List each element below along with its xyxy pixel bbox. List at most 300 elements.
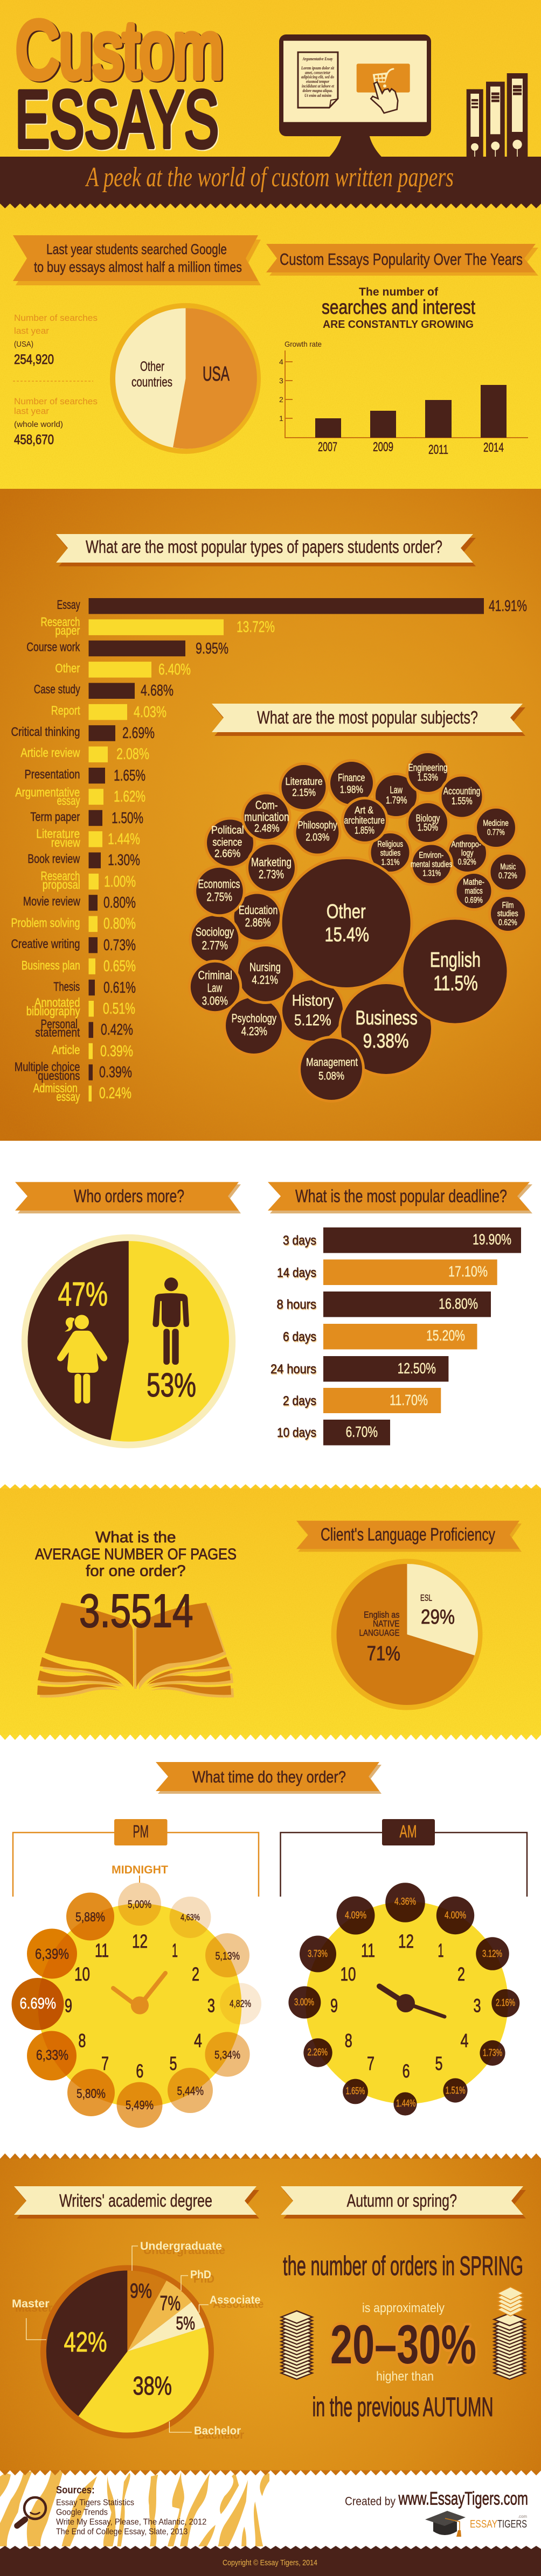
bar chart: paper types: Problem solving [11, 916, 80, 930]
bubble labels: 2.66% [214, 848, 240, 860]
bar chart: paper types: 1.00% [104, 873, 136, 890]
icon: computer monitor with essay and shopping cart [279, 34, 431, 157]
bar chart: paper types: 4.68% [141, 682, 174, 699]
banner: autumn or spring [281, 2186, 526, 2219]
pie chart: academic degree: 5% [176, 2313, 195, 2334]
clock: PM: 11 [95, 1940, 109, 1961]
banner: language proficiency [296, 1521, 522, 1552]
bubble labels: 9.38% [363, 1030, 409, 1052]
AM tab and bracket [280, 1819, 527, 1897]
pie chart: academic degree [12, 2240, 260, 2439]
bubble labels: 0.62% [498, 918, 517, 928]
logo: Essay Tigers [425, 2511, 527, 2537]
bar chart: deadlines: 11.70% [390, 1392, 428, 1408]
bar chart: deadlines: 15.20% [426, 1327, 465, 1344]
bar chart: growth rate: 4 [279, 357, 283, 366]
pie chart: female vs male [22, 1234, 235, 1448]
icon: essay paper: amet, consectetur [305, 69, 331, 75]
text block: sources: Essay Tigers Statistics [56, 2498, 134, 2507]
bar chart: paper types [11, 598, 527, 1104]
bar chart: paper types: proposal [43, 878, 80, 892]
bubble labels: Law [207, 981, 222, 995]
bubble labels: Music [500, 862, 516, 872]
icon: essay paper: adipisicing elit, sed do [301, 74, 334, 80]
bar chart: paper types: essay [57, 794, 80, 808]
text block: searches and interest: ARE CONSTANTLY GROWING [323, 319, 474, 331]
bar chart: paper types: Thesis [53, 980, 80, 994]
bar chart: deadlines: 19.90% [473, 1231, 511, 1248]
bubble labels: matics [464, 887, 483, 896]
clock: PM: 10 [74, 1964, 90, 1985]
bubble labels: Criminal [198, 968, 232, 982]
bubble labels: History [292, 992, 334, 1009]
bar chart: paper types: 4.03% [134, 704, 167, 721]
bubble labels: Biology [416, 813, 440, 824]
bar chart: paper types: bibliography [26, 1004, 80, 1018]
clock: AM: 4.00% [445, 1910, 466, 1920]
banner: popular subjects [212, 704, 525, 736]
clock: PM: 6,33% [36, 2047, 68, 2063]
icon: essay paper: dolore magna aliqua. [303, 88, 333, 93]
bar chart: deadlines: 6 days [283, 1330, 316, 1344]
text block: created by: Created by [345, 2495, 396, 2508]
icon: left paper stack [281, 2311, 313, 2380]
text block: average number of pages: AVERAGE NUMBER OF PAGES [35, 1546, 237, 1563]
banner: popularity over the years [266, 244, 538, 276]
bar chart: deadlines: 16.80% [439, 1295, 478, 1312]
icon: open book [37, 1603, 234, 1697]
bubble labels: 2.86% [245, 916, 271, 929]
clock: PM: 6,39% [35, 1946, 69, 1962]
bar chart: paper types: essay [56, 1090, 80, 1104]
bar chart: paper types: 0.39% [100, 1043, 133, 1060]
pie chart: language proficiency: NATIVE [373, 1619, 400, 1629]
title: Custom: Custom [16, 4, 223, 95]
bubble labels: munication [244, 810, 289, 824]
bar chart: paper types: 6.40% [158, 661, 191, 678]
pie chart: academic degree: Associate [210, 2294, 260, 2306]
bar chart: paper types: Multiple choice [15, 1060, 80, 1074]
bar chart: paper types: 1.44% [108, 831, 140, 848]
clock: PM: 5,49% [126, 2098, 154, 2112]
PM tab and bracket: PM [133, 1822, 149, 1841]
icon: essay paper: Argumentative Essay [302, 56, 333, 61]
bar chart: paper types: 0.65% [103, 958, 136, 975]
clock: PM: 7 [101, 2053, 109, 2074]
bar chart: paper types: paper [55, 623, 80, 637]
text block: search statistics: (whole world) [14, 420, 63, 429]
icon: pointing hand cursor [371, 82, 398, 113]
bubble labels: studies [497, 909, 518, 918]
bubble labels: 0.72% [498, 872, 517, 881]
bubble labels: 0.69% [464, 896, 483, 905]
clock: AM: 10 [341, 1964, 356, 1985]
PM tab and bracket [13, 1819, 259, 1897]
bubble labels: Engineering [408, 762, 447, 773]
bubble labels: Philosophy [298, 820, 337, 831]
bar chart: paper types: Term paper [30, 810, 80, 824]
pie chart: academic degree: Master [12, 2298, 50, 2310]
bubble labels: architecture [344, 815, 385, 826]
bar chart: deadlines: 24 hours [270, 1362, 316, 1377]
bar chart: deadlines: 10 days [277, 1426, 316, 1440]
banner: academic degree [14, 2186, 259, 2219]
bar chart: paper types: Essay [57, 598, 80, 612]
bubble labels: Nursing [249, 960, 281, 974]
banner: searched Google [13, 235, 261, 285]
clock: AM: 5 [435, 2053, 443, 2074]
clock: AM: 6 [403, 2061, 410, 2082]
header ribbon with tagline [0, 157, 541, 208]
icon: essay paper: Lorem ipsum dolor sit [301, 65, 335, 71]
clock: AM: 12 [398, 1931, 414, 1952]
bar chart: paper types: 0.24% [99, 1085, 131, 1102]
bubble labels: 2.48% [254, 823, 280, 834]
banner: academic degree: Writers' academic degree [59, 2191, 212, 2210]
banner: who orders more [15, 1182, 241, 1213]
bar chart: deadlines: 17.10% [448, 1263, 488, 1280]
bar chart: paper types: Annotated [34, 995, 80, 1009]
bar chart: paper types: 0.51% [103, 1000, 135, 1017]
clock: PM: 5,80% [77, 2087, 106, 2101]
bar chart: paper types: 41.91% [489, 598, 527, 615]
clock: AM: 1 [438, 1940, 444, 1961]
clock: AM [288, 1883, 519, 2116]
bubble labels: Mathe- [463, 878, 484, 887]
bar chart: paper types: 1.30% [108, 852, 140, 869]
banner: what time [156, 1762, 382, 1794]
panel: pages and language [0, 1484, 541, 1740]
bubble labels: Law [390, 785, 403, 796]
bar chart: deadlines: 6.70% [346, 1423, 378, 1440]
bubble labels: science [212, 837, 242, 848]
clock: PM: 6.69% [19, 1995, 56, 2012]
bar chart: growth rate: Growth rate [285, 340, 322, 348]
pie chart: academic degree: PhD [190, 2269, 211, 2281]
icon: magnifying glass [17, 2497, 46, 2526]
icon: essay paper: Ut enim ad minim [304, 93, 331, 98]
logo: Essay Tigers: TIGERS [497, 2518, 527, 2530]
text block: average number of pages: What is the [95, 1529, 176, 1546]
clock: PM: 5,88% [75, 1910, 105, 1925]
banner: what time: What time do they order? [192, 1767, 346, 1786]
big number: 3.5514: 3.5514 [79, 1585, 193, 1637]
panel: header and search statistics [0, 0, 541, 489]
bubble labels: Medicine [483, 819, 509, 828]
bubble labels: Environ- [419, 851, 443, 860]
bar chart: paper types: 0.39% [99, 1064, 132, 1081]
bar chart: growth rate: 1 [279, 414, 283, 423]
bubble labels: 1.98% [340, 784, 363, 796]
pie chart: academic degree: 9% [130, 2280, 152, 2303]
clock: AM: 4.36% [394, 1896, 416, 1907]
bar chart: paper types: 2.08% [116, 746, 149, 763]
bubble labels: Marketing [251, 855, 292, 869]
bubble labels: 0.92% [458, 858, 476, 867]
banner: popular types of papers [56, 534, 476, 566]
bubble labels: Anthropo- [452, 840, 481, 850]
bubble labels: Political [211, 825, 244, 837]
clock: AM: 2 [457, 1964, 465, 1985]
pie chart: academic degree: Bachelor [194, 2425, 241, 2437]
pie chart: USA vs other countries: USA [203, 363, 230, 385]
panel: what time do they order [12, 1762, 527, 2128]
logo: Essay Tigers: .com [518, 2514, 527, 2519]
bubble labels [196, 762, 518, 1082]
bubble labels: 5.08% [318, 1070, 344, 1082]
banner: searched Google: Last year students searched Google [46, 241, 227, 257]
AM tab and bracket: AM [400, 1822, 417, 1841]
bar chart: paper types: 0.80% [103, 894, 136, 911]
bar chart: growth rate: 2014 [483, 440, 504, 455]
clock: AM: 2.26% [307, 2047, 328, 2058]
banner: autumn or spring: Autumn or spring? [347, 2191, 457, 2210]
bar chart: paper types: statement [35, 1025, 80, 1039]
bubble labels: Com- [255, 798, 278, 812]
icon: right paper stack [494, 2287, 525, 2380]
bar chart: paper types: Book review [27, 852, 80, 866]
text block: spring vs autumn: is approximately [362, 2301, 445, 2315]
bar chart: growth rate: 2007 [318, 440, 337, 454]
clock: PM: 4 [194, 2031, 202, 2052]
bubble labels: 2.03% [306, 832, 330, 844]
pie chart: academic degree: 42% [64, 2327, 107, 2358]
bar chart: paper types: Creative writing [11, 937, 80, 951]
bubble labels: 1.85% [355, 825, 374, 836]
text block: sources: The End of College Essay, Slate, 2013 [56, 2527, 188, 2536]
bar chart: paper types: Argumentative [15, 785, 80, 799]
clock: AM: 9 [330, 1996, 338, 2017]
banner: popular types of papers: What are the most popular types of papers students order? [86, 537, 442, 557]
bubble labels: 1.31% [422, 869, 441, 878]
panel: writers and seasons [0, 2153, 541, 2475]
text block: search statistics: Number of searches [14, 313, 98, 323]
bar chart: paper types: 2.69% [122, 725, 155, 742]
clock: PM: 8 [78, 2031, 86, 2052]
clock: PM: 2 [192, 1964, 199, 1985]
pie chart: female vs male: 53% [147, 1367, 196, 1404]
bubble labels: 2.73% [259, 868, 284, 881]
bubble labels: 2.75% [207, 890, 232, 904]
bubble labels: Art & [355, 805, 373, 816]
panel: footer with sources [0, 2470, 541, 2576]
icon: essay paper [298, 52, 338, 108]
clock: PM: 5,13% [216, 1950, 240, 1962]
text block: search statistics: last year [14, 326, 49, 336]
pie chart: academic degree: Undergraduate [140, 2240, 222, 2252]
bubble labels: 4.23% [241, 1024, 267, 1038]
text block: created by [345, 2488, 528, 2509]
bubble labels: mental studies [411, 860, 452, 869]
clock: AM: 1.51% [446, 2085, 466, 2096]
bar chart: paper types: Case study [34, 682, 80, 696]
text block: average number of pages: for one order? [86, 1563, 185, 1580]
bubble labels: 0.77% [487, 828, 505, 837]
bar chart: paper types: 1.50% [112, 810, 143, 827]
pie chart: academic degree: 38% [133, 2372, 172, 2400]
bubble labels: Film [502, 901, 514, 910]
bar chart: paper types: 0.73% [103, 937, 136, 954]
panel: who orders and deadlines [15, 1182, 532, 1448]
bubble labels: 15.4% [324, 923, 369, 945]
text block: searches and interest: searches and interest [322, 296, 476, 318]
text block: spring vs autumn: higher than [376, 2369, 434, 2384]
bubble labels: 1.31% [382, 858, 400, 867]
text block: search statistics: 254,920 [14, 352, 54, 367]
bubble labels: Accounting [443, 786, 480, 797]
clock: PM: 5 [169, 2053, 177, 2074]
bar chart: paper types: Presentation [25, 767, 80, 781]
pie chart: language proficiency: 71% [367, 1643, 400, 1665]
bar chart: paper types: Critical thinking [11, 725, 80, 739]
bar chart: paper types: Movie review [23, 894, 80, 908]
bubble labels: Business [356, 1007, 418, 1029]
icon: woman [57, 1315, 107, 1403]
copyright band: Copyright © Essay Tigers, 2014 [223, 2558, 317, 2567]
clock: PM: 4,82% [230, 1998, 251, 2009]
text block: average number of pages [35, 1529, 237, 1580]
clock: PM: 12 [132, 1931, 148, 1952]
bar chart: deadlines [270, 1227, 521, 1445]
clock: AM: 3 [473, 1996, 481, 2017]
copyright band [0, 2546, 541, 2576]
icon: three binders [467, 73, 528, 157]
clock: AM: 1.65% [346, 2086, 365, 2096]
pie chart: language proficiency: ESL [420, 1592, 432, 1603]
clock: AM: 4 [460, 2031, 469, 2052]
bubble labels: Management [306, 1056, 358, 1069]
bar chart: paper types: 9.95% [196, 640, 228, 657]
bubble labels: 1.53% [418, 772, 438, 783]
pie chart: language proficiency: LANGUAGE [359, 1627, 400, 1638]
text block: search statistics: (USA) [14, 340, 33, 349]
bar chart: paper types: 13.72% [237, 619, 275, 636]
bar chart: deadlines: 12.50% [398, 1360, 436, 1377]
pie chart: academic degree: 7% [159, 2292, 181, 2315]
bar chart: paper types: Research [41, 869, 80, 883]
text block: sources [56, 2485, 206, 2536]
bubble labels: 3.06% [202, 994, 228, 1008]
bar chart: paper types: Admission [33, 1081, 78, 1095]
bubble labels: Other [327, 900, 366, 922]
text block: sources: Google Trends [56, 2508, 108, 2517]
clock: AM: 4.09% [345, 1910, 366, 1920]
bar chart: growth rate: 2009 [373, 440, 393, 454]
text block: sources: Write My Essay, Please, The Atlantic, 2012 [56, 2517, 206, 2526]
bar chart: paper types: 0.80% [103, 915, 136, 932]
title: Essays: ESSAYS [15, 74, 219, 164]
bar chart: paper types: Report [51, 703, 80, 717]
bar chart: growth rate: 3 [279, 376, 283, 385]
bar chart: growth rate: 2 [279, 395, 283, 404]
bubble labels: 5.12% [294, 1012, 331, 1029]
bar chart: deadlines: 14 days [277, 1266, 316, 1280]
icon: essay paper: eiusmod tempor [306, 79, 330, 84]
bar chart: paper types: Other [55, 661, 80, 675]
bar chart: paper types: 0.61% [103, 979, 136, 996]
text block: sources: Sources: [56, 2485, 95, 2496]
bubble labels: 1.50% [418, 822, 438, 833]
pie chart: USA vs other countries: countries [131, 375, 172, 390]
bubble labels: Literature [286, 776, 323, 788]
clock: AM: 11 [361, 1940, 375, 1961]
banner: popular subjects: What are the most popular subjects? [257, 707, 478, 727]
pie chart: USA vs other countries: Other [140, 359, 164, 374]
bubble labels: Religious [377, 840, 403, 849]
text block: searches and interest [322, 286, 476, 331]
clock: PM: 5,00% [128, 1899, 151, 1911]
logo: Essay Tigers: ESSAY [470, 2518, 497, 2530]
banner: popular deadline [268, 1182, 532, 1213]
bar chart: paper types: Business plan [22, 958, 80, 972]
pie chart: language proficiency [331, 1559, 483, 1710]
bar chart: paper types: 1.65% [114, 767, 145, 784]
text block: search statistics: last year [14, 406, 49, 416]
clock: AM: 8 [345, 2031, 352, 2052]
bubble chart: subjects [189, 752, 527, 1101]
panel: paper types and subjects [0, 489, 541, 1141]
bubble labels: studies [380, 848, 400, 858]
clock: AM: 1.73% [483, 2047, 502, 2058]
bubble labels: 4.21% [252, 973, 278, 986]
bar chart: growth rate: 2011 [428, 443, 448, 457]
clock: PM: 5,34% [214, 2049, 240, 2061]
bar chart: paper types: Personal [41, 1017, 78, 1031]
bar chart: paper types: 0.42% [101, 1021, 133, 1038]
pie chart: language proficiency: English as [364, 1610, 400, 1620]
bubble labels: Finance [338, 773, 365, 784]
icon: essay paper: incididunt ut labore et [302, 83, 334, 88]
bar chart: deadlines: 8 hours [277, 1297, 316, 1312]
clock: PM: 3 [207, 1996, 215, 2017]
clock: PM: 5,44% [177, 2084, 204, 2097]
text block: searches and interest: The number of [359, 286, 439, 298]
banner: searched Google: to buy essays almost half a million times [34, 259, 242, 275]
bubble labels: Education [239, 903, 278, 917]
bubble labels: Psychology [232, 1012, 276, 1025]
bar chart: deadlines: 2 days [283, 1394, 316, 1408]
bubble labels: 1.79% [386, 795, 407, 806]
clock: PM: 1 [172, 1940, 178, 1961]
text block: search statistics: Number of searches [14, 396, 98, 406]
bubble labels: 1.55% [452, 796, 473, 806]
tiger stripe pattern [0, 2471, 275, 2550]
bar chart: paper types: review [51, 836, 80, 850]
pie chart: USA vs other countries [110, 303, 261, 454]
text block: search statistics [13, 313, 98, 447]
clock: AM: 1.44% [396, 2098, 416, 2109]
bubble labels: Economics [198, 878, 240, 890]
pie chart: language proficiency: 29% [421, 1606, 455, 1629]
bar chart: growth rate [279, 340, 528, 457]
clock: AM: 3.00% [294, 1997, 314, 2008]
bar chart: paper types: Literature [36, 827, 80, 841]
bar chart: paper types: questions [38, 1069, 80, 1083]
bubble labels: English [430, 949, 481, 972]
bar chart: paper types: Article review [20, 746, 80, 760]
clock: AM: 7 [367, 2053, 374, 2074]
clock: AM: 2.16% [496, 1997, 515, 2008]
icon: orange buy button with cart [357, 64, 410, 93]
bubble labels: 2.15% [292, 787, 316, 798]
bar chart: paper types: 1.62% [114, 788, 145, 805]
clock: PM: 4,63% [181, 1912, 200, 1922]
bubble labels: 2.77% [202, 938, 228, 952]
bubble labels: logy [461, 848, 473, 858]
banner: who orders more: Who orders more? [74, 1186, 184, 1206]
clock: PM: 9 [65, 1996, 72, 2017]
bar chart: deadlines: 3 days [283, 1233, 316, 1248]
